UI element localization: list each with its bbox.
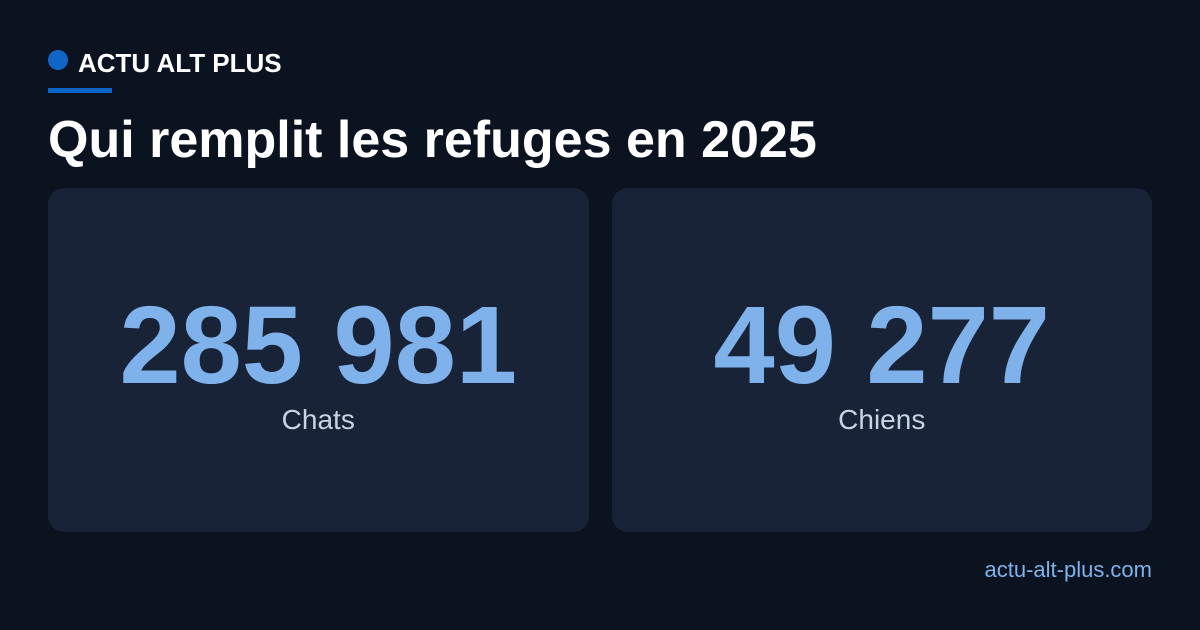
panel: chats xyxy=(48,188,588,532)
stat: chats number: 285 981 xyxy=(119,284,517,407)
stat: chiens number: 49 277 xyxy=(714,284,1050,407)
panel: chiens xyxy=(612,188,1152,532)
source link: actu-alt-plus.com xyxy=(984,557,1152,582)
icon: brand dot xyxy=(48,50,68,70)
title: Qui remplit les refuges en 2025 xyxy=(48,111,817,169)
brand name: ACTU ALT PLUS xyxy=(78,48,282,78)
brand underline xyxy=(48,88,112,93)
stat: chats label: Chats xyxy=(282,404,355,435)
stat: chiens label: Chiens xyxy=(838,404,925,435)
